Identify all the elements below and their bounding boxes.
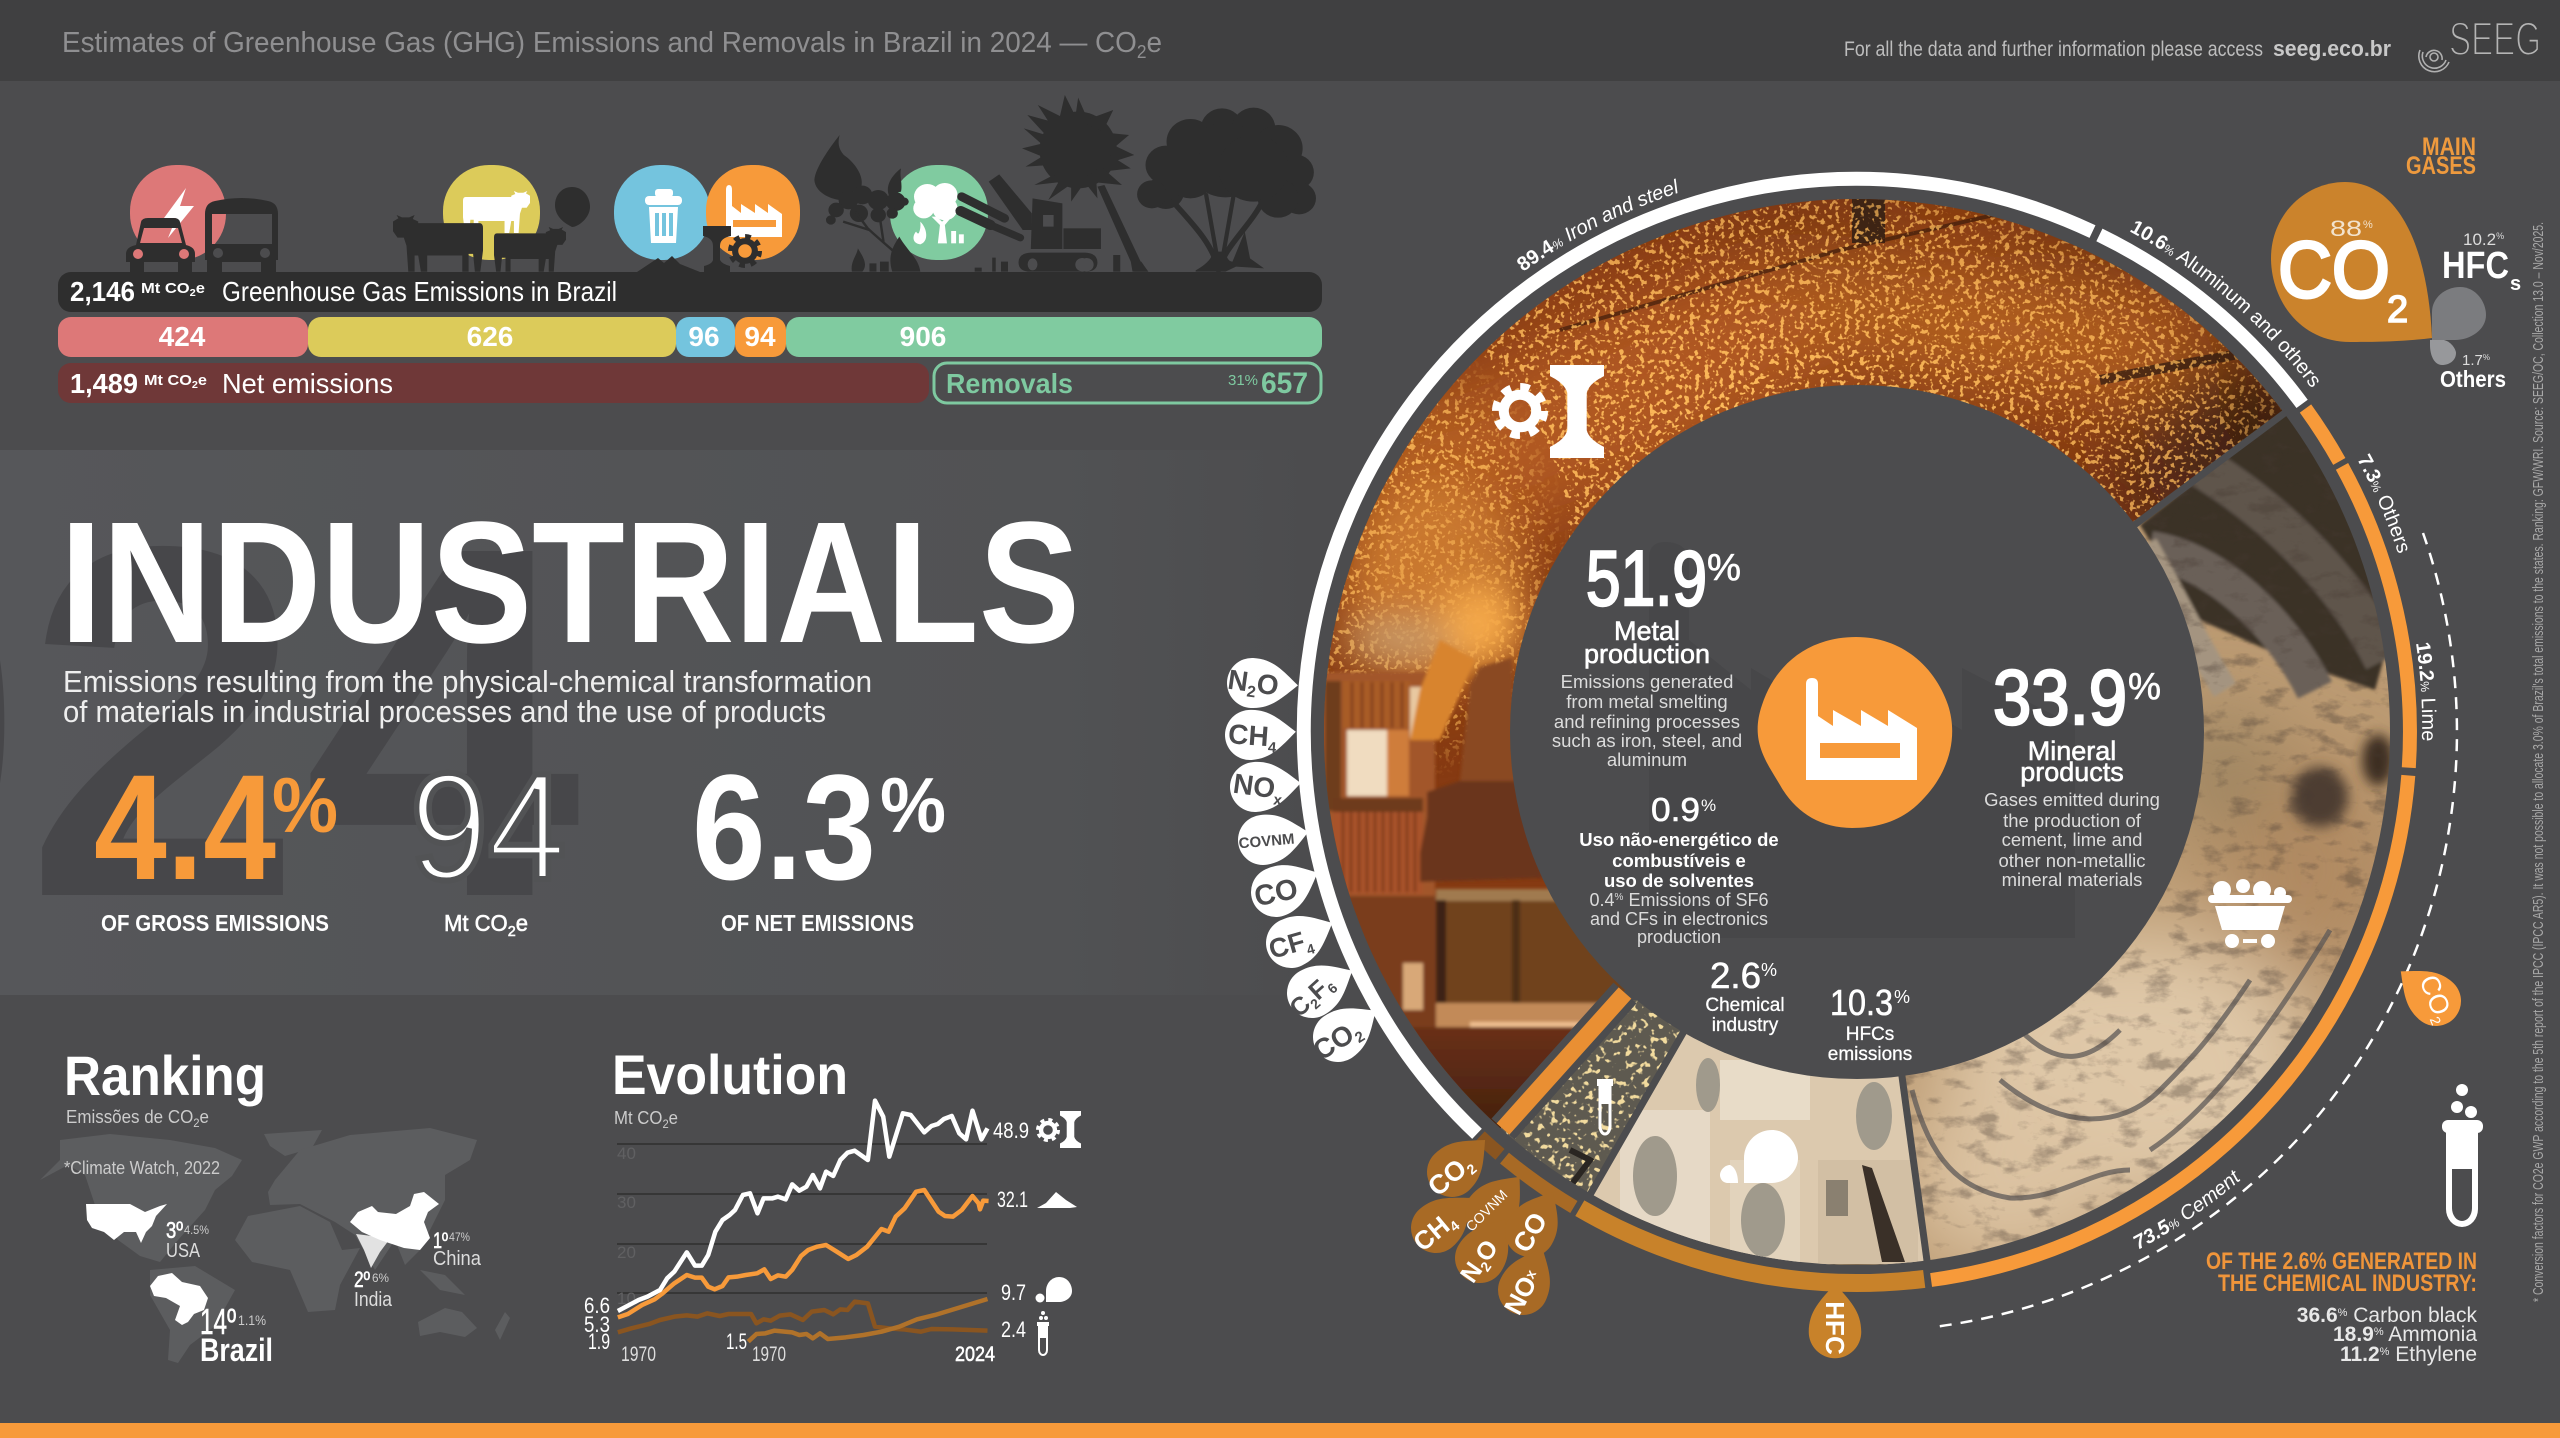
removals bar: 657: [1261, 367, 1308, 400]
mineral products text: Gases emitted during: [1984, 789, 2160, 810]
chemical industry text: industry: [1712, 1015, 1779, 1036]
total emissions bar: Mt CO: [141, 280, 185, 297]
ring labels: 19.2 % Lime: [2416, 642, 2436, 740]
chart value labels: [584, 1118, 1029, 1366]
drop: CO2: [1303, 990, 1390, 1072]
silhouette: cattle and methane drop: [393, 187, 590, 272]
net emissions bar: [58, 363, 929, 403]
country: China and India: 2º: [354, 1267, 370, 1292]
non-energy use text: Emissions of SF6: [1623, 890, 1768, 910]
country: Brazil: 1.1%: [238, 1312, 266, 1328]
heading: INDUSTRIALS: INDUSTRIALS: [60, 485, 1080, 679]
chart gridlines and ticks: 40: [617, 1144, 636, 1163]
drop: CO2: [1417, 1122, 1502, 1207]
stat: Mt CO2e: 94: [410, 742, 566, 912]
panel: sector donut: [1225, 172, 2461, 1358]
removals bar: Removals: [946, 368, 1073, 399]
chemical industry callout: %: [2374, 1326, 2384, 1338]
unit label: 2: [662, 1117, 669, 1131]
gas: HFCs: [2432, 230, 2521, 340]
gas drops: brown group: [1401, 1122, 1575, 1323]
stat: gross emissions: 4.4: [94, 743, 276, 911]
sector stacked bar: 96: [688, 321, 720, 352]
chart value labels: 1.5: [726, 1329, 747, 1354]
HFC emissions text: HFCs: [1846, 1024, 1894, 1045]
mineral products text: products: [2020, 757, 2124, 787]
drop: CF4: 4: [1305, 940, 1317, 958]
chart gridlines and ticks: 20: [617, 1243, 636, 1262]
drop: N2O: 2: [1246, 683, 1257, 701]
non-energy use text: 0.4: [1590, 890, 1615, 910]
drop: C2F6: C: [1284, 990, 1316, 1023]
drop: C2F6: [1278, 949, 1364, 1027]
panel: evolution chart: [584, 1043, 1081, 1366]
chemical industry text: Chemical: [1705, 995, 1785, 1016]
sector stacked bar: 626: [467, 321, 513, 352]
HFC emissions text: 10.3: [1830, 982, 1893, 1023]
stat: gross emissions: OF GROSS EMISSIONS: [101, 910, 329, 936]
mineral products text: the production of: [2003, 810, 2142, 831]
photo: mineral products: [1906, 416, 2390, 1260]
chart lines: [618, 1101, 989, 1342]
sector stacked bar: 94: [744, 321, 776, 352]
drop: CH4: [1401, 1179, 1487, 1263]
non-energy use text: Uso não-energético de: [1579, 829, 1779, 850]
chart value labels: 2024: [955, 1343, 995, 1366]
stat: Mt CO2e: 2: [508, 923, 516, 940]
net emissions bar: Net emissions: [222, 368, 393, 399]
icon: droplet on air conditioners: [1720, 1130, 1798, 1183]
centre circle: [1510, 385, 2204, 1079]
chart value labels: 1970: [621, 1343, 656, 1366]
HFC emissions text: emissions: [1828, 1044, 1912, 1065]
header title: Estimates of Greenhouse Gas (GHG) Emissions and Removals in Brazil in 2024 — CO: [62, 27, 1181, 59]
non-energy use text: and CFs in electronics: [1590, 909, 1768, 929]
drop: CH4: CH: [1407, 1210, 1455, 1257]
drop: CF4: CF: [1265, 926, 1308, 965]
panel: main gases: [2271, 133, 2521, 392]
heading: Ranking: Ranking: [64, 1044, 266, 1107]
net emissions bar: e: [198, 372, 207, 389]
country: China and India: 6%: [372, 1271, 389, 1285]
drop: CO2 mineral: CO: [2413, 971, 2456, 1019]
icon: agriculture blob with cow: [443, 165, 540, 260]
icon: industry blob with factory: [706, 165, 800, 260]
gas: HFCs: 10.2: [2463, 230, 2496, 249]
photos ring: [1324, 199, 2390, 1265]
country: USA: [86, 1204, 209, 1262]
chemical industry callout: 18.9: [2333, 1323, 2374, 1346]
country: China and India: India: [354, 1289, 393, 1311]
ranking notes: Emissões de CO: [66, 1107, 201, 1127]
photo: chemical industry: [1500, 1000, 1680, 1192]
drop: C2F6: F: [1303, 974, 1333, 1006]
icon: waste blob with bin: [614, 165, 710, 260]
chemical industry callout: [2206, 1248, 2477, 1366]
drop: CO2: 2: [1352, 1028, 1368, 1047]
non-energy use text: production: [1637, 927, 1721, 947]
drop: CH4: 4: [1446, 1217, 1463, 1235]
icon: test tube on chemical photo: [1597, 1079, 1613, 1134]
chemical industry callout: %: [2380, 1346, 2390, 1358]
icon: gear and steel beam: [1496, 365, 1604, 458]
chemical industry callout: OF THE 2.6% GENERATED IN: [2206, 1248, 2477, 1275]
gas: CO2: 2: [2387, 289, 2408, 331]
ring labels: [1517, 178, 2436, 1250]
SEEG logo: [2419, 12, 2541, 72]
total emissions bar: e: [196, 280, 205, 297]
drop: CH4: CH: [1227, 718, 1270, 752]
ranking notes: [64, 1107, 220, 1178]
country: China and India: China: [433, 1248, 482, 1270]
drop: NOx: [1490, 1238, 1565, 1323]
drop: NOx: NO: [1498, 1271, 1543, 1319]
panel: ranking: [40, 1044, 510, 1368]
non-energy use text: 0.9: [1651, 791, 1700, 828]
metal production text: and refining processes: [1554, 711, 1740, 732]
chart gridlines and ticks: 30: [617, 1193, 636, 1212]
icon: mining cart: [2208, 879, 2292, 948]
sector description: Emissions resulting from the physical-chemical transformation: [63, 664, 872, 699]
silhouette: fire, shrubs, excavator, palm, tree: [814, 95, 1316, 272]
drop: N2O: O: [1255, 668, 1281, 701]
ring labels: 7.3% Others: [2358, 453, 2408, 553]
chemical industry callout: Carbon black: [2347, 1304, 2477, 1327]
chemical industry callout: 11.2: [2340, 1343, 2380, 1366]
metal production text: [1552, 534, 1742, 770]
removals bar: 31%: [1228, 372, 1258, 389]
chart value labels: 5.3: [584, 1312, 610, 1337]
sector stacked bar: 906: [900, 321, 946, 352]
header link text: For all the data and further information please access: [1844, 38, 2263, 61]
drop: HFC: HFC: [1820, 1301, 1850, 1355]
chart icons: [1036, 1111, 1081, 1356]
net emissions bar: 2: [192, 380, 198, 391]
non-energy use text: combustíveis e: [1612, 850, 1746, 871]
mineral products text: Mineral: [2028, 736, 2116, 766]
drop: COVNM: COVNM: [1462, 1186, 1511, 1235]
main gases heading: GASES: [2406, 152, 2476, 180]
gas: CO2: CO: [2278, 225, 2390, 314]
gas: CO2: 88: [2330, 216, 2362, 241]
chemical industry callout: THE CHEMICAL INDUSTRY:: [2218, 1270, 2477, 1297]
drop: CO: [1496, 1180, 1575, 1266]
chemical industry text: [1705, 955, 1785, 1036]
drop: CH4: 4: [1267, 739, 1277, 757]
icon: land use blob with tree: [890, 165, 988, 260]
drop: CH4: [1223, 707, 1298, 762]
metal production text: aluminum: [1607, 749, 1687, 770]
mineral products text: other non-metallic: [1998, 850, 2146, 871]
stat: Mt CO2e: e: [516, 910, 528, 936]
chemical industry text: %: [1761, 960, 1777, 980]
drop: N2O: N: [1455, 1257, 1488, 1288]
gas: CO2: %: [2363, 219, 2373, 231]
drop: C2F6: 6: [1324, 980, 1341, 997]
chart value labels: 32.1: [997, 1187, 1028, 1212]
drop: CO2 mineral: 2: [2427, 1014, 2445, 1028]
centre factory icon: [1758, 637, 1952, 828]
country: China and India: [350, 1192, 482, 1311]
mineral products text: %: [2128, 666, 2161, 708]
unit label: e: [669, 1108, 678, 1128]
country: USA: 4.5%: [184, 1223, 209, 1237]
drop: CO2: 2: [1463, 1160, 1480, 1178]
drop: NOx: x: [1521, 1267, 1539, 1281]
total emissions bar: Greenhouse Gas Emissions in Brazil: [222, 276, 617, 307]
sector stacked bar: [58, 317, 1322, 357]
country: China and India: 1º: [433, 1228, 448, 1253]
lower furnace scene: [1324, 640, 1624, 1128]
drop: COVNM: [1455, 1161, 1539, 1247]
background factory shape: [1649, 542, 2075, 938]
wedge dividers: [1503, 409, 2290, 1268]
gas: HFCs: s: [2510, 273, 2521, 295]
world map: [40, 1128, 510, 1363]
chemical industry text: 2.6: [1710, 955, 1761, 996]
drop: CO: [1243, 850, 1328, 925]
drop: NOx: [1228, 758, 1303, 814]
icon: large test tube: [2442, 1084, 2483, 1227]
country: Brazil: [150, 1273, 273, 1368]
total emissions bar: 2,146: [70, 276, 135, 307]
drop: N2O: [1226, 657, 1299, 710]
main gases heading: MAIN: [2422, 133, 2476, 161]
sector description: of materials in industrial processes and the use of products: [63, 694, 826, 729]
HFC emissions text: [1828, 982, 1912, 1065]
total emissions bar: [58, 272, 1322, 312]
ranking notes: e: [200, 1107, 209, 1127]
stat: net emissions: OF NET EMISSIONS: [721, 910, 914, 936]
bottom orange bar: [0, 1423, 2560, 1438]
chart value labels: 9.7: [1001, 1280, 1026, 1305]
unit label: Mt CO: [614, 1108, 666, 1128]
drop: N2O: N: [1226, 664, 1250, 697]
title band background: [0, 450, 1320, 995]
drop: COVNM: COVNM: [1238, 831, 1295, 852]
non-energy use text: %: [1701, 796, 1716, 815]
gas: others: Others: [2440, 366, 2506, 392]
gas: HFCs: %: [2496, 231, 2504, 241]
outer ring segments: [1304, 179, 2410, 1283]
header link text: seeg.eco.br: [2273, 36, 2391, 61]
total emissions bar: 2: [190, 288, 196, 299]
drop: CF4: [1258, 900, 1343, 976]
drop: N2O: [1445, 1206, 1526, 1293]
ring labels: 10.6% Aluminum and others: [2130, 221, 2318, 387]
photo: metal production: [1324, 199, 2282, 1200]
gas: others: 1.7: [2462, 352, 2483, 369]
header title: e: [1146, 27, 1162, 59]
metal production text: such as iron, steel, and: [1552, 730, 1742, 751]
sector silhouettes and icons row: [126, 95, 1316, 272]
ring labels: 89.4% Iron and steel: [1517, 178, 1678, 270]
mineral products text: mineral materials: [2002, 869, 2142, 890]
ranking notes: 2: [193, 1116, 200, 1130]
country: USA: USA: [166, 1240, 201, 1262]
chart value labels: 2.4: [1001, 1317, 1026, 1342]
gas: HFCs: HFC: [2442, 245, 2509, 287]
silhouette: car and bus: [126, 198, 278, 272]
chemical industry callout: Ammonia: [2384, 1323, 2477, 1346]
ranking notes: *Climate Watch, 2022: [64, 1158, 220, 1178]
chart value labels: 1.9: [588, 1329, 610, 1354]
drop: CO: CO: [1507, 1207, 1553, 1258]
tree icon inside blob: [913, 183, 964, 244]
stat: net emissions: %: [880, 761, 946, 849]
sector stacked bar: 424: [159, 321, 206, 352]
country: China and India: 47%: [449, 1230, 470, 1244]
chart gridlines and ticks: 10: [617, 1289, 636, 1308]
chart value labels: 6.6: [584, 1293, 610, 1318]
stat: Mt CO2e: Mt CO: [444, 910, 510, 936]
drop: CO2: CO: [1307, 1018, 1359, 1066]
chart gridlines and ticks: [617, 1144, 987, 1308]
drop: CO2 mineral: [2385, 952, 2471, 1036]
gas: others: [2430, 340, 2506, 392]
removals bar: [934, 363, 1321, 403]
drop: N2O: 2: [1477, 1259, 1495, 1274]
metal production text: production: [1584, 639, 1710, 669]
country: Brazil: Brazil: [200, 1332, 273, 1368]
mineral products text: [1984, 653, 2161, 890]
chemical industry callout: Ethylene: [2389, 1343, 2477, 1366]
sector description: [63, 664, 872, 729]
main gases heading: [2406, 133, 2476, 180]
header bar: [0, 0, 2560, 81]
net emissions bar: 1,489: [70, 368, 138, 399]
drop: CO2: CO: [1422, 1153, 1472, 1202]
net emissions bar: Mt CO: [144, 372, 188, 389]
non-energy use text: uso de solventes: [1604, 870, 1754, 891]
non-energy use text: %: [1615, 892, 1624, 903]
stat: gross emissions: %: [272, 761, 338, 849]
drop: HFC: [1809, 1284, 1861, 1358]
ring labels: 73.5% Cement: [2133, 1170, 2240, 1250]
heading: Evolution: Evolution: [612, 1043, 848, 1106]
country: USA: 3º: [166, 1217, 183, 1243]
gas drops: white group: [1223, 657, 1390, 1072]
silhouette: mountains, anvil, gear: [637, 226, 759, 272]
photo: HFC air conditioners: [1594, 1034, 1924, 1265]
drop: C2F6: 2: [1307, 995, 1324, 1012]
chart value labels: 48.9: [993, 1118, 1029, 1143]
drop: NOx: x: [1272, 791, 1284, 809]
chemical industry callout: %: [2338, 1307, 2348, 1319]
chemical industry callout: 36.6: [2297, 1304, 2338, 1327]
gas: others: %: [2483, 353, 2490, 362]
icon: energy blob: [130, 165, 226, 260]
metal production text: Metal: [1614, 616, 1680, 646]
drop: N2O: O: [1470, 1235, 1504, 1267]
mineral products text: 33.9: [1993, 653, 2127, 741]
drop: CO: CO: [1252, 873, 1301, 913]
metal production text: %: [1707, 547, 1741, 589]
chart value labels: 1970: [752, 1343, 786, 1366]
metal production text: Emissions generated: [1561, 671, 1733, 692]
metal production text: from metal smelting: [1566, 691, 1728, 712]
mineral products text: cement, lime and: [2002, 829, 2142, 850]
country: Brazil: 14º: [200, 1301, 236, 1342]
metal production text: 51.9: [1586, 534, 1707, 622]
header title: 2: [1137, 42, 1146, 62]
drop: NOx: NO: [1231, 768, 1277, 804]
dashed mineral bracket: [1934, 533, 2457, 1327]
stat: net emissions: 6.3: [692, 743, 876, 911]
non-energy use text: [1579, 791, 1779, 947]
drop: COVNM: [1234, 807, 1313, 869]
HFC emissions text: %: [1894, 987, 1910, 1007]
gas: CO2: [2271, 182, 2432, 342]
